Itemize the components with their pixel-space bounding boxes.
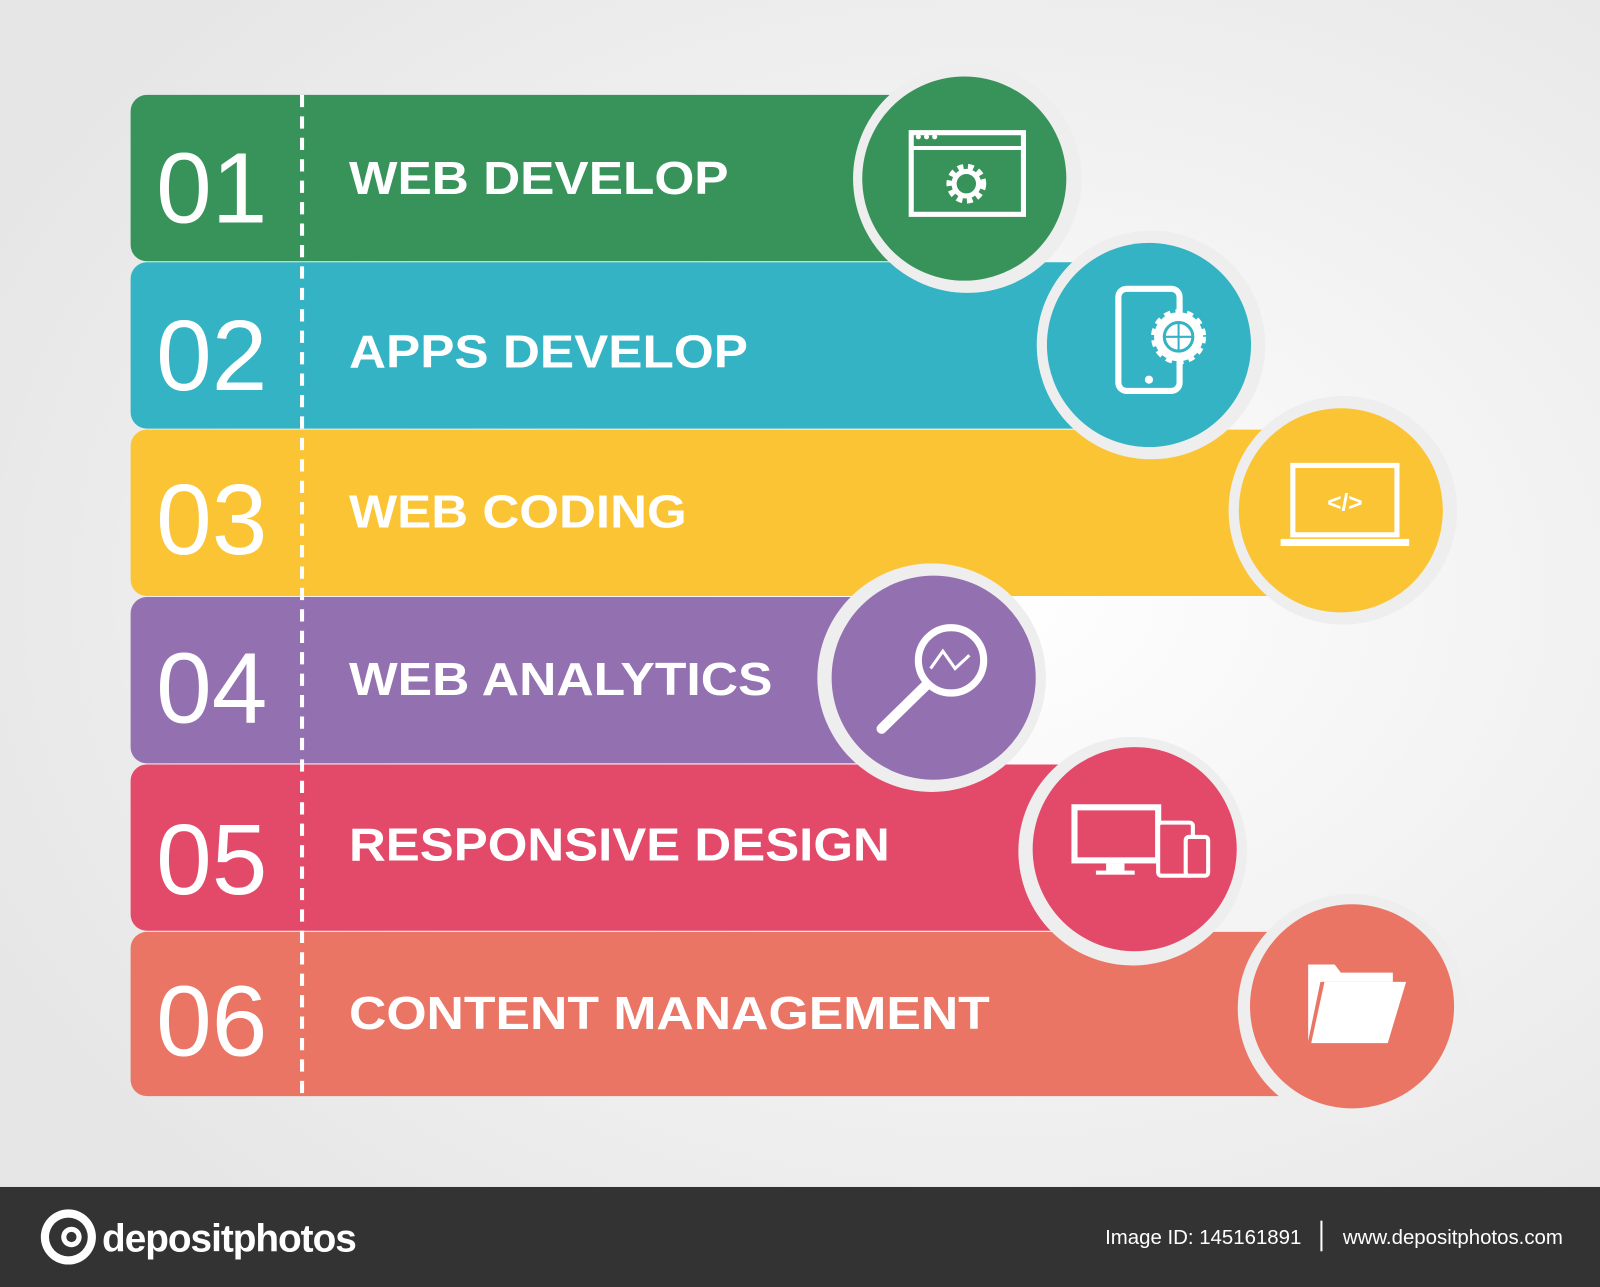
heading: web develop: WEB DEVELOP	[349, 152, 729, 204]
heading: web analytics: WEB ANALYTICS	[349, 653, 772, 705]
heading: web coding: WEB CODING	[349, 486, 687, 538]
heading: responsive design: RESPONSIVE DESIGN	[349, 818, 890, 870]
panel: 03 web coding bar	[131, 430, 1304, 596]
panel: 02 apps develop bar	[131, 262, 1110, 429]
number 05: 05	[156, 804, 267, 916]
icon: depositphotos logo	[41, 1209, 96, 1265]
panel: 06 content management bar	[131, 932, 1314, 1096]
panel: 01 web develop bar	[131, 95, 927, 261]
icon: laptop code circle: </>	[1327, 489, 1363, 516]
panel: 05 responsive design bar	[131, 764, 1110, 931]
footer url: www.depositphotos.com	[1342, 1227, 1563, 1249]
icon: analytics magnifier circle	[817, 563, 1046, 792]
footer bar	[0, 1187, 1600, 1287]
heading: content management: CONTENT MANAGEMENT	[349, 987, 990, 1039]
footer image id: Image ID: 145161891	[1105, 1227, 1301, 1249]
icon: browser gear circle	[853, 64, 1082, 293]
number 04: 04	[156, 633, 267, 745]
panel: 04 web analytics bar	[131, 597, 906, 763]
number 03: 03	[156, 464, 267, 576]
footer brand text: depositphotos	[102, 1217, 356, 1260]
number 01: 01	[156, 132, 267, 244]
icon: responsive devices circle	[1018, 737, 1247, 966]
icon: mobile gear circle	[1037, 231, 1265, 459]
number 06: 06	[156, 965, 267, 1077]
heading: apps develop: APPS DEVELOP	[349, 325, 748, 377]
icon: folder circle	[1238, 894, 1466, 1123]
icon: laptop code circle	[1229, 396, 1457, 625]
number 02: 02	[156, 300, 267, 412]
